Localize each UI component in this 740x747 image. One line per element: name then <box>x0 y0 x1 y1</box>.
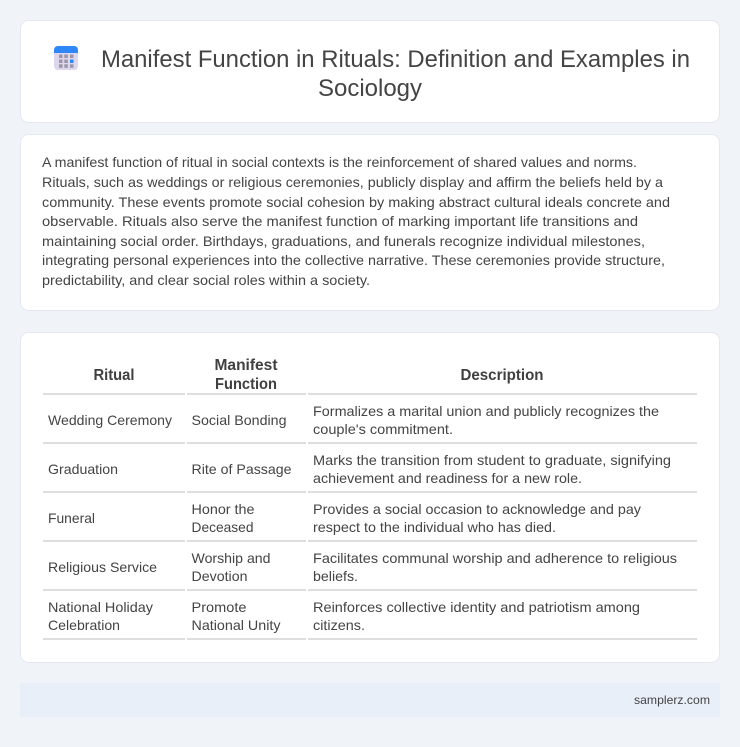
footer credit: samplerz.com <box>634 693 710 707</box>
row: Funeral: Deceased <box>192 519 254 535</box>
paragraph text: community. These events promote social cohesion by making abstract cultural ideals concrete and <box>42 194 670 210</box>
row: Funeral: Honor the <box>192 501 255 517</box>
title: Sociology <box>318 75 422 102</box>
row: National Holiday Celebration: citizens. <box>313 617 365 633</box>
row: Graduation <box>48 452 671 486</box>
row: National Holiday Celebration: Promote <box>192 599 247 615</box>
row: Wedding Ceremony: Wedding Ceremony <box>48 412 172 428</box>
icon: calendar <box>54 46 78 70</box>
row: National Holiday Celebration: National Holiday <box>48 599 153 615</box>
row: National Holiday Celebration: Reinforces collective identity and patriotism among <box>313 599 640 615</box>
table header: Function <box>215 376 277 393</box>
panel: title header <box>20 20 720 122</box>
row: Religious Service <box>48 550 677 584</box>
row: Funeral: Provides a social occasion to acknowledge and pay <box>313 501 641 517</box>
panel: intro paragraph <box>20 134 720 310</box>
row: Religious Service: beliefs. <box>313 568 358 584</box>
panel: table <box>20 332 720 662</box>
row: Graduation: Graduation <box>48 461 118 477</box>
paragraph text <box>42 154 670 288</box>
row: Religious Service: Devotion <box>192 568 248 584</box>
row: Funeral <box>48 501 641 535</box>
row: Wedding Ceremony: Formalizes a marital union and publicly recognizes the <box>313 403 659 419</box>
paragraph text: maintaining social order. Birthdays, graduations, and funerals recognize individual milestones, <box>42 233 645 249</box>
row: Graduation: achievement and readiness for a new role. <box>313 470 582 486</box>
paragraph text: Rituals, such as weddings or religious ceremonies, publicly display and affirm the beliefs held by a <box>42 174 663 190</box>
table header: Ritual <box>94 367 134 384</box>
title: Manifest Function in Rituals: Definition and Examples in <box>101 46 690 73</box>
row: Wedding Ceremony <box>48 403 659 437</box>
row: Religious Service: Religious Service <box>48 559 157 575</box>
table header <box>94 357 544 393</box>
row: National Holiday Celebration: National Unity <box>192 617 280 633</box>
row: Wedding Ceremony: couple's commitment. <box>313 421 453 437</box>
footer bar <box>20 683 720 717</box>
table header: Description <box>460 367 544 384</box>
title <box>101 46 690 102</box>
row: Graduation: Marks the transition from student to graduate, signifying <box>313 452 671 468</box>
row: Religious Service: Facilitates communal worship and adherence to religious <box>313 550 677 566</box>
paragraph text: observable. Rituals also serve the manifest function of marking important life transitions and <box>42 213 638 229</box>
row: Graduation: Rite of Passage <box>192 461 292 477</box>
row: Religious Service: Worship and <box>192 550 270 566</box>
paragraph text: integrating personal experiences into the collective narrative. These ceremonies provide structure, <box>42 252 665 268</box>
row: National Holiday Celebration <box>48 599 640 633</box>
paragraph text: A manifest function of ritual in social contexts is the reinforcement of shared values and norms. <box>42 154 637 170</box>
row: Funeral: respect to the individual who has died. <box>313 519 556 535</box>
paragraph text: predictability, and clear social roles within a society. <box>42 272 370 288</box>
row: National Holiday Celebration: Celebration <box>48 617 120 633</box>
row: Funeral: Funeral <box>48 510 95 526</box>
table header: Manifest <box>214 357 278 374</box>
row: Wedding Ceremony: Social Bonding <box>192 412 286 428</box>
